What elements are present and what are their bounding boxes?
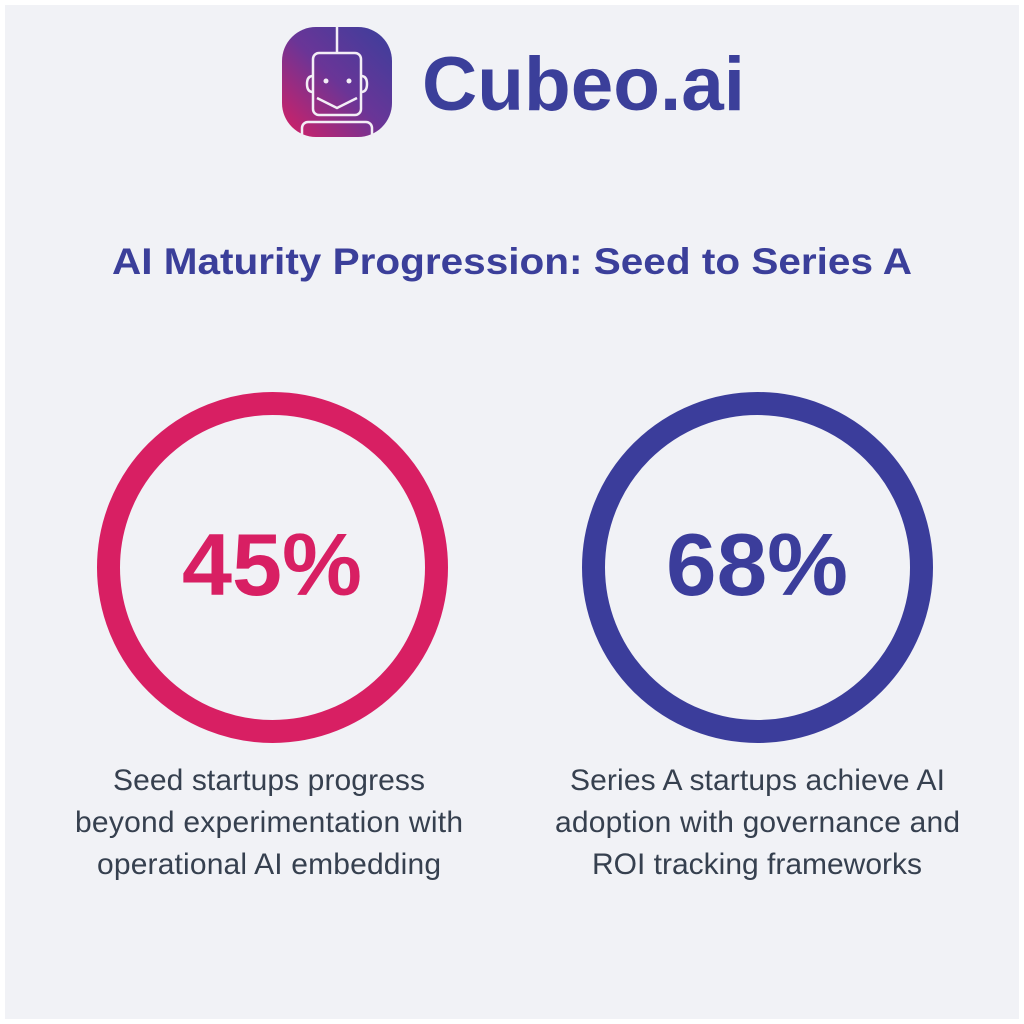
logo [5,27,1019,147]
icon: robot [5,27,1019,147]
caption: series A: Series A startups achieve AI [570,764,945,797]
caption: seed: beyond experimentation with [75,806,463,839]
panel: series A [555,404,969,881]
brand name: Cubeo.ai [422,42,745,127]
panel: seed [75,404,472,881]
ring: 45% [108,404,436,732]
caption: series A: ROI tracking frameworks [592,848,922,881]
caption: seed: operational AI embedding [97,848,441,881]
caption: series A: adoption with governance and [555,806,960,839]
title: AI Maturity Progression: Seed to Series A [112,241,912,282]
stat: 45%: 45% [182,515,362,614]
caption: seed: Seed startups progress [113,764,425,797]
stat: 68%: 68% [666,515,848,614]
ring: 68% [594,404,922,732]
